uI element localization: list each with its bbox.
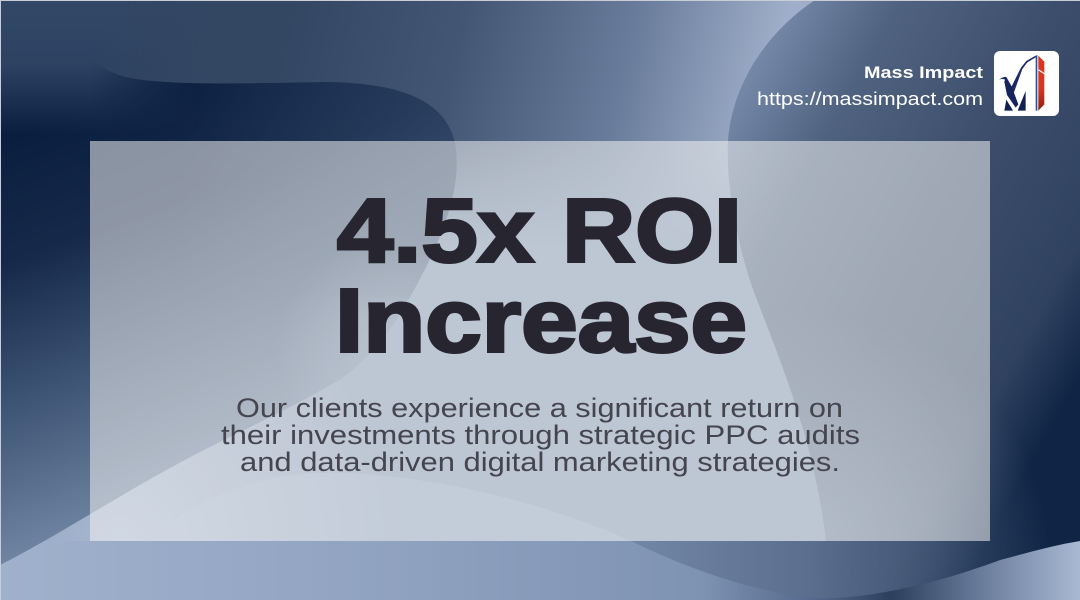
description text [221, 393, 860, 477]
icon: Mass Impact logo [994, 51, 1059, 116]
panel: translucent content card [90, 141, 990, 541]
brand url: https://massimpact.com [757, 89, 983, 109]
title: 4.5x ROI Increase [335, 182, 747, 372]
description text: and data-driven digital marketing strategies. [240, 447, 840, 477]
description text: their investments through strategic PPC audits [221, 420, 860, 450]
brand name: Mass Impact [864, 63, 983, 82]
title: 4.5x ROI Increase: Increase [335, 272, 747, 372]
description text: Our clients experience a significant return on [236, 393, 843, 423]
title: 4.5x ROI Increase: 4.5x ROI [337, 182, 742, 282]
